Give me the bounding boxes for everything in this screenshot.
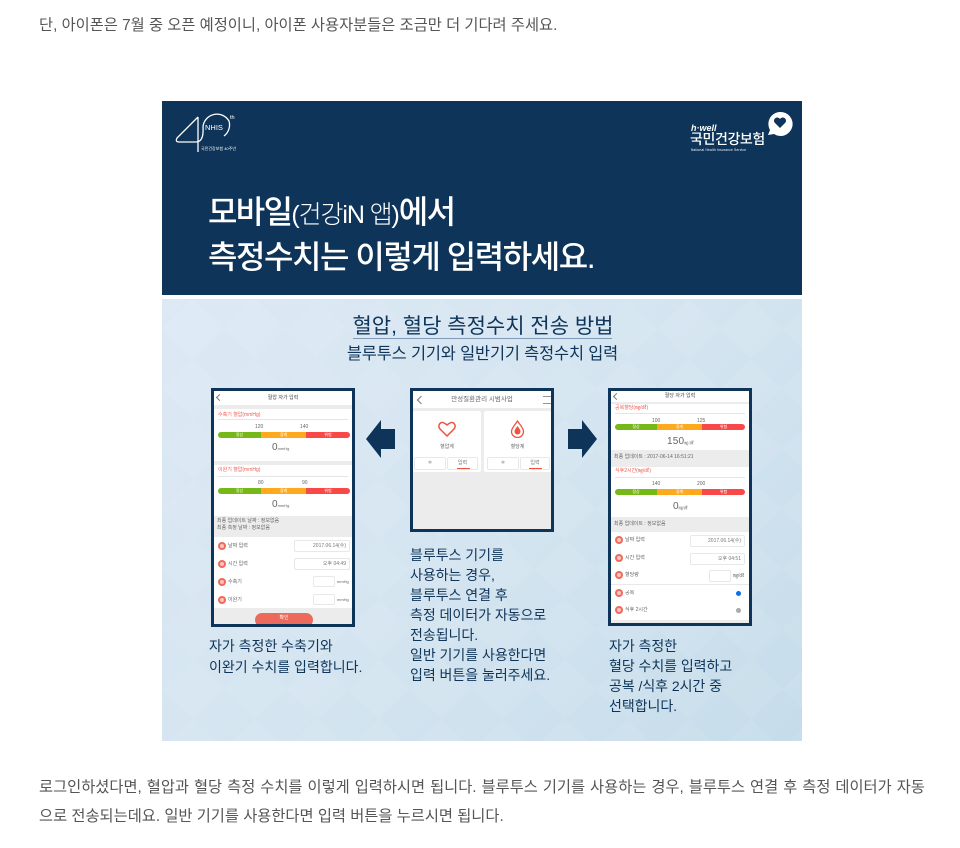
caption: bluetooth and input: 입력 버튼을 눌러주세요.	[410, 667, 550, 683]
systolic section: 정상	[236, 432, 243, 437]
after meal section: 정상	[632, 489, 640, 494]
update info: 최종 측정 날짜 : 정보없음	[217, 525, 270, 531]
blood pressure card: ✱	[428, 460, 432, 466]
fasting section: 100	[652, 418, 660, 424]
input form: ㎎/㎗	[733, 573, 744, 579]
phone: chronic disease pilot menu	[410, 388, 554, 532]
input form: 2017.06.14(수)	[313, 543, 346, 549]
systolic section: 140	[300, 424, 308, 430]
systolic section: 위험	[324, 432, 332, 437]
icon: NHIS 40th logo	[176, 114, 236, 152]
systolic section: 수축기 혈압(mmHg)	[218, 412, 260, 418]
caption: blood sugar: 자가 측정한	[609, 638, 677, 654]
background diamond pattern	[162, 299, 802, 741]
input form	[214, 537, 352, 608]
after meal section: 식후2시간(㎎/㎗)	[615, 468, 651, 474]
fasting section: 125	[697, 418, 705, 424]
icon: NHIS 40th logo: th	[230, 115, 235, 121]
after meal section: 0㎎/㎗	[673, 501, 688, 512]
caption: bluetooth and input: 전송됩니다.	[410, 627, 478, 643]
blood sugar card: 혈당계	[511, 444, 524, 450]
method panel	[162, 299, 802, 741]
input form: 이완기	[228, 597, 242, 603]
caption: blood pressure: 자가 측정한 수축기와	[209, 638, 333, 654]
closing paragraph	[39, 779, 925, 825]
heading underline	[353, 338, 612, 339]
update info	[217, 518, 279, 531]
after meal section: 200	[697, 481, 705, 487]
diastolic section: 이완기 혈압(mmHg)	[218, 467, 260, 473]
input form: 오후 04:49	[323, 561, 346, 567]
caption: blood pressure	[209, 638, 362, 675]
icon: h-well NHIS logo	[690, 112, 793, 152]
systolic section: 경계	[280, 432, 287, 437]
caption: bluetooth and input: 사용하는 경우,	[410, 567, 495, 583]
phone: blood pressure input	[211, 388, 355, 627]
app title bar	[214, 391, 352, 405]
blood sugar card: ✱	[501, 460, 505, 466]
caption: blood pressure: 이완기 수치를 입력합니다.	[209, 659, 362, 675]
icon: blood drop	[510, 420, 524, 438]
diastolic section: 위험	[324, 488, 332, 493]
icon: NHIS 40th logo: 국민건강보험 40주년	[201, 145, 236, 151]
input form: mmHg	[337, 597, 349, 602]
caption: bluetooth and input: 일반 기기를 사용한다면	[410, 647, 546, 663]
icon: h-well NHIS logo: h·well	[691, 123, 717, 133]
app title bar	[413, 391, 551, 408]
fasting section	[611, 404, 749, 450]
blood sugar card	[484, 411, 551, 472]
diastolic section: 정상	[236, 488, 243, 493]
diastolic section	[214, 465, 352, 516]
input form: 시간 입력	[625, 555, 645, 561]
last update: 최종 업데이트 : 2017-06-14 16:51:21	[614, 454, 694, 460]
caption: bluetooth and input: 블루투스 연결 후	[410, 587, 508, 603]
diastolic section: 90	[302, 480, 308, 486]
caption: bluetooth and input: 측정 데이터가 자동으로	[410, 607, 546, 623]
save button: 확인	[279, 615, 289, 621]
blood sugar card: 입력	[530, 460, 540, 466]
caption: bluetooth and input: 블루투스 기기를	[410, 547, 504, 563]
input form: 식후 2시간	[625, 607, 648, 613]
diastolic section: 80	[258, 480, 264, 486]
systolic section: 120	[255, 424, 263, 430]
app title bar	[611, 391, 749, 402]
systolic section	[214, 409, 352, 461]
panel subheading: 블루투스 기기와 일반기기 측정수치 입력	[347, 345, 618, 363]
caption: blood sugar: 혈당 수치를 입력하고	[609, 658, 732, 674]
closing paragraph: 로그인하셨다면, 혈압과 혈당 측정 수치를 이렇게 입력하시면 됩니다. 블루투스 기기를 사용하는 경우, 블루투스 연결 후 측정 데이터가 자동	[39, 779, 925, 796]
input form: mmHg	[337, 579, 349, 584]
icon: NHIS 40th logo: NHIS	[205, 123, 223, 132]
input form: 2017.06.14(수)	[708, 538, 741, 544]
intro paragraph: 단, 아이폰은 7월 중 오픈 예정이니, 아이폰 사용자분들은 조금만 더 기다려 주세요.	[39, 17, 557, 34]
blood pressure card	[413, 411, 481, 472]
icon: heart	[438, 422, 456, 437]
input form: 오후 04:51	[718, 556, 741, 562]
panel heading: 혈압, 혈당 측정수치 전송 방법	[352, 315, 614, 338]
app title bar: 혈당 자가 입력	[665, 393, 695, 399]
caption: blood sugar: 선택합니다.	[609, 698, 677, 714]
diastolic section: 0mmHg	[272, 499, 289, 510]
input form: 날짜 입력	[228, 543, 248, 549]
fasting section: 위험	[720, 424, 727, 429]
after meal section: 140	[652, 481, 660, 487]
icon: h-well NHIS logo: 국민건강보험	[690, 131, 765, 147]
blood pressure card: 혈압계	[440, 444, 454, 450]
update info: 최종 업데이트 날짜 : 정보없음	[217, 518, 279, 524]
header title line 2: 측정수치는 이렇게 입력하세요.	[208, 239, 594, 275]
caption: blood sugar: 공복 /식후 2시간 중	[609, 678, 722, 694]
phone: blood sugar input	[608, 388, 752, 626]
update info: 최종 업데이트 : 정보없음	[614, 521, 666, 527]
app title bar: 만성질환관리 시범사업	[451, 396, 513, 403]
systolic section: 0mmHg	[272, 442, 289, 453]
fasting section: 정상	[632, 424, 640, 429]
blood pressure card: 입력	[458, 460, 467, 466]
caption: blood sugar	[609, 638, 732, 714]
input form: 공복	[625, 590, 634, 596]
input form: 날짜 입력	[625, 537, 645, 543]
after meal section: 위험	[720, 489, 727, 494]
fasting section: 150㎎/㎗	[667, 436, 694, 447]
after meal section	[611, 467, 749, 517]
caption: bluetooth and input	[410, 547, 550, 683]
input form: 시간 입력	[228, 561, 248, 567]
fasting section: 공복혈당(㎎/㎗)	[615, 405, 648, 411]
input form: 수축기	[228, 579, 242, 585]
fasting section: 경계	[676, 424, 683, 429]
save button	[255, 613, 313, 627]
icon: h-well NHIS logo: National Health Insurance Service	[691, 148, 746, 152]
input form: 혈당량	[625, 572, 639, 578]
arrow: right	[568, 420, 597, 458]
after meal section: 경계	[676, 489, 683, 494]
arrow: left	[366, 420, 395, 458]
diastolic section: 경계	[280, 488, 287, 493]
input form	[611, 532, 749, 620]
closing paragraph: 으로 전송되는데요. 일반 기기를 사용한다면 입력 버튼을 누르시면 됩니다.	[39, 808, 504, 825]
infographic header panel	[162, 101, 802, 295]
header title line 1: 모바일(건강iN 앱)에서	[208, 194, 454, 230]
app title bar: 혈압 자가 입력	[268, 395, 298, 401]
